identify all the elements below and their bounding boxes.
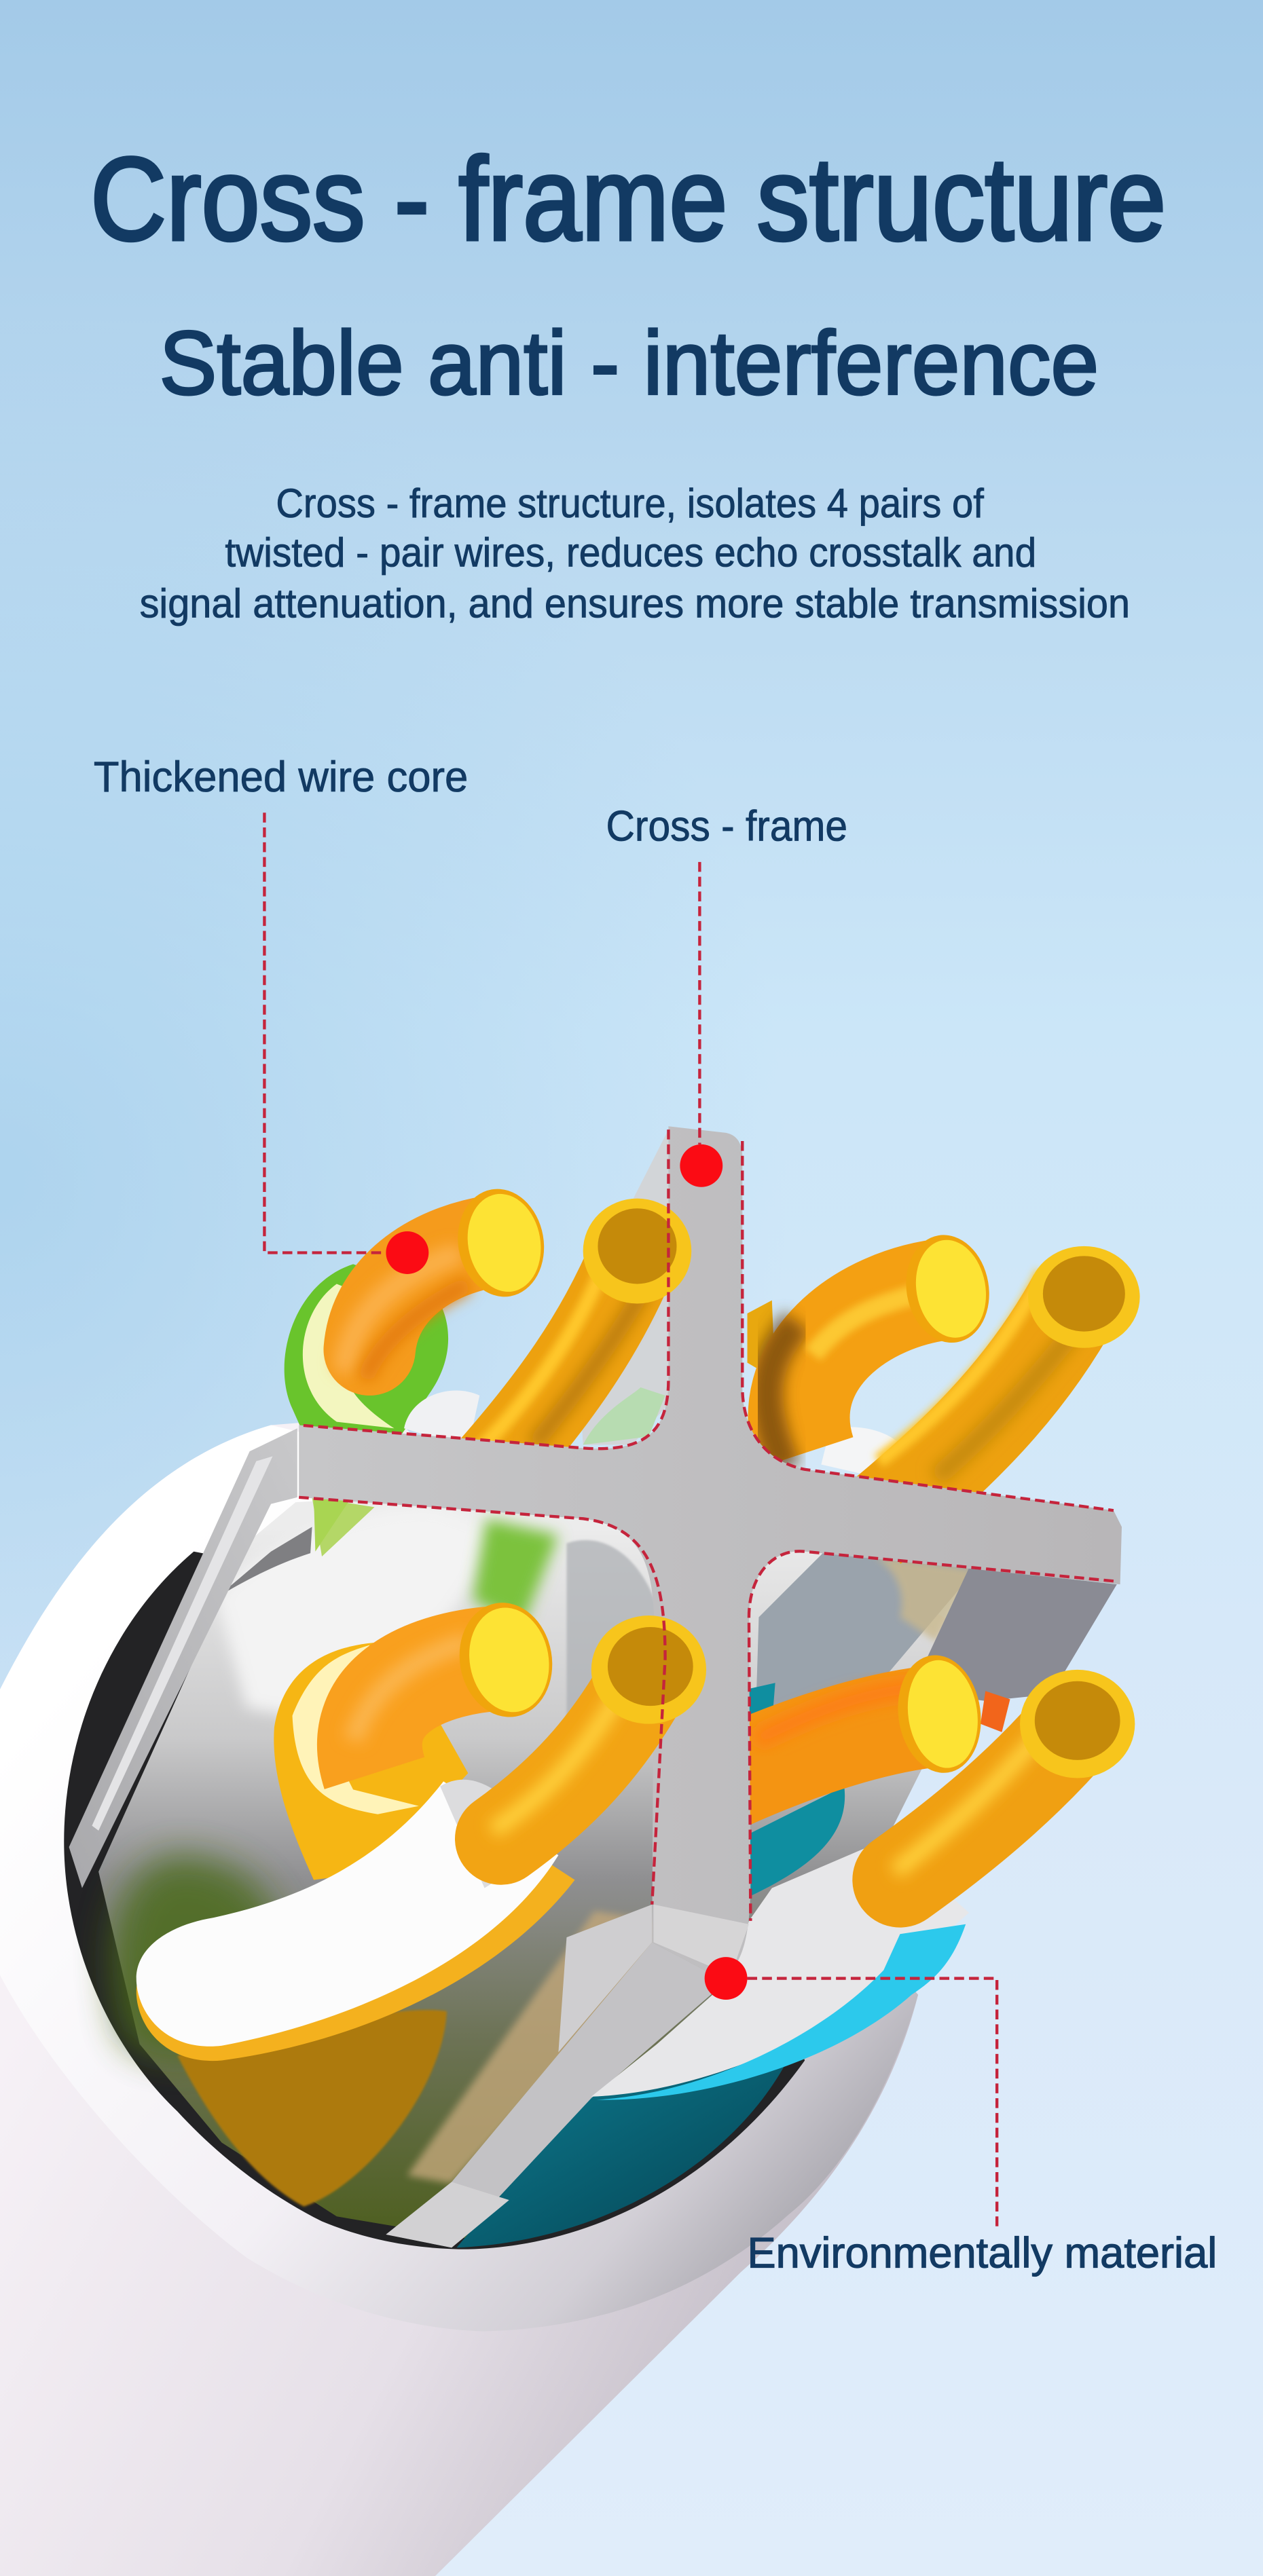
green wire top left xyxy=(285,1264,448,1465)
wire: thickened top left xyxy=(345,1182,553,1379)
frame cross xyxy=(299,1126,1122,1979)
title: Cross - frame structure xyxy=(90,132,1166,265)
teal bottom wire xyxy=(456,2052,792,2247)
callout: thickened wire core: Thickened wire core xyxy=(94,753,468,801)
wire cap: gold top centre-left, overlapping the frame xyxy=(583,1199,691,1303)
wire: gold top centre-left xyxy=(476,1254,644,1470)
callout: cross-frame: Cross - frame xyxy=(606,802,847,850)
wire: gold bottom centre xyxy=(493,1616,706,1839)
olive shadow xyxy=(112,1855,283,2056)
wire: gold top right xyxy=(871,1246,1140,1527)
cable opening xyxy=(64,1552,805,2250)
wire: orange bottom left xyxy=(353,1595,561,1773)
white inner wire xyxy=(217,1507,493,1724)
wire: orange bottom right xyxy=(722,1650,1010,1781)
frame rear depth bottom xyxy=(386,1942,726,2247)
frame depth left xyxy=(69,1428,297,1888)
white and cyan wire bottom right xyxy=(591,1839,969,2097)
description text xyxy=(140,480,1130,626)
cable rim xyxy=(0,1425,918,2332)
wire: orange top right xyxy=(767,1229,997,1470)
description text: signal attenuation, and ensures more stable transmission xyxy=(140,580,1130,626)
wire: gold bottom right xyxy=(895,1670,1135,1880)
callout: thickened wire core xyxy=(94,753,468,1274)
green wire inside xyxy=(473,1518,558,1626)
tan translucent panel xyxy=(407,1911,657,2184)
callout: environmentally material: Environmentally material xyxy=(748,2229,1217,2277)
subtitle: Stable anti - interference xyxy=(160,313,1099,413)
callout: environmentally material xyxy=(705,1957,1217,2277)
frame depth top xyxy=(575,1130,668,1444)
white wire bottom left xyxy=(136,1780,575,2061)
white insulation top xyxy=(404,1391,479,1448)
interior fill xyxy=(98,1478,985,2243)
description text: twisted - pair wires, reduces echo crosstalk and xyxy=(225,529,1036,575)
yellow bottom wire xyxy=(177,2010,447,2207)
cable illustration xyxy=(0,1126,1140,2576)
frame depth panels xyxy=(566,1540,665,1757)
teal wire behind xyxy=(739,1683,845,1901)
dashed frame outline xyxy=(299,1130,1114,1921)
description text: Cross - frame structure, isolates 4 pairs of xyxy=(276,480,984,526)
yellow white-sheathed wire bottom left xyxy=(274,1642,468,1880)
callout: cross-frame xyxy=(606,802,847,1187)
cable jacket xyxy=(0,1415,918,2576)
